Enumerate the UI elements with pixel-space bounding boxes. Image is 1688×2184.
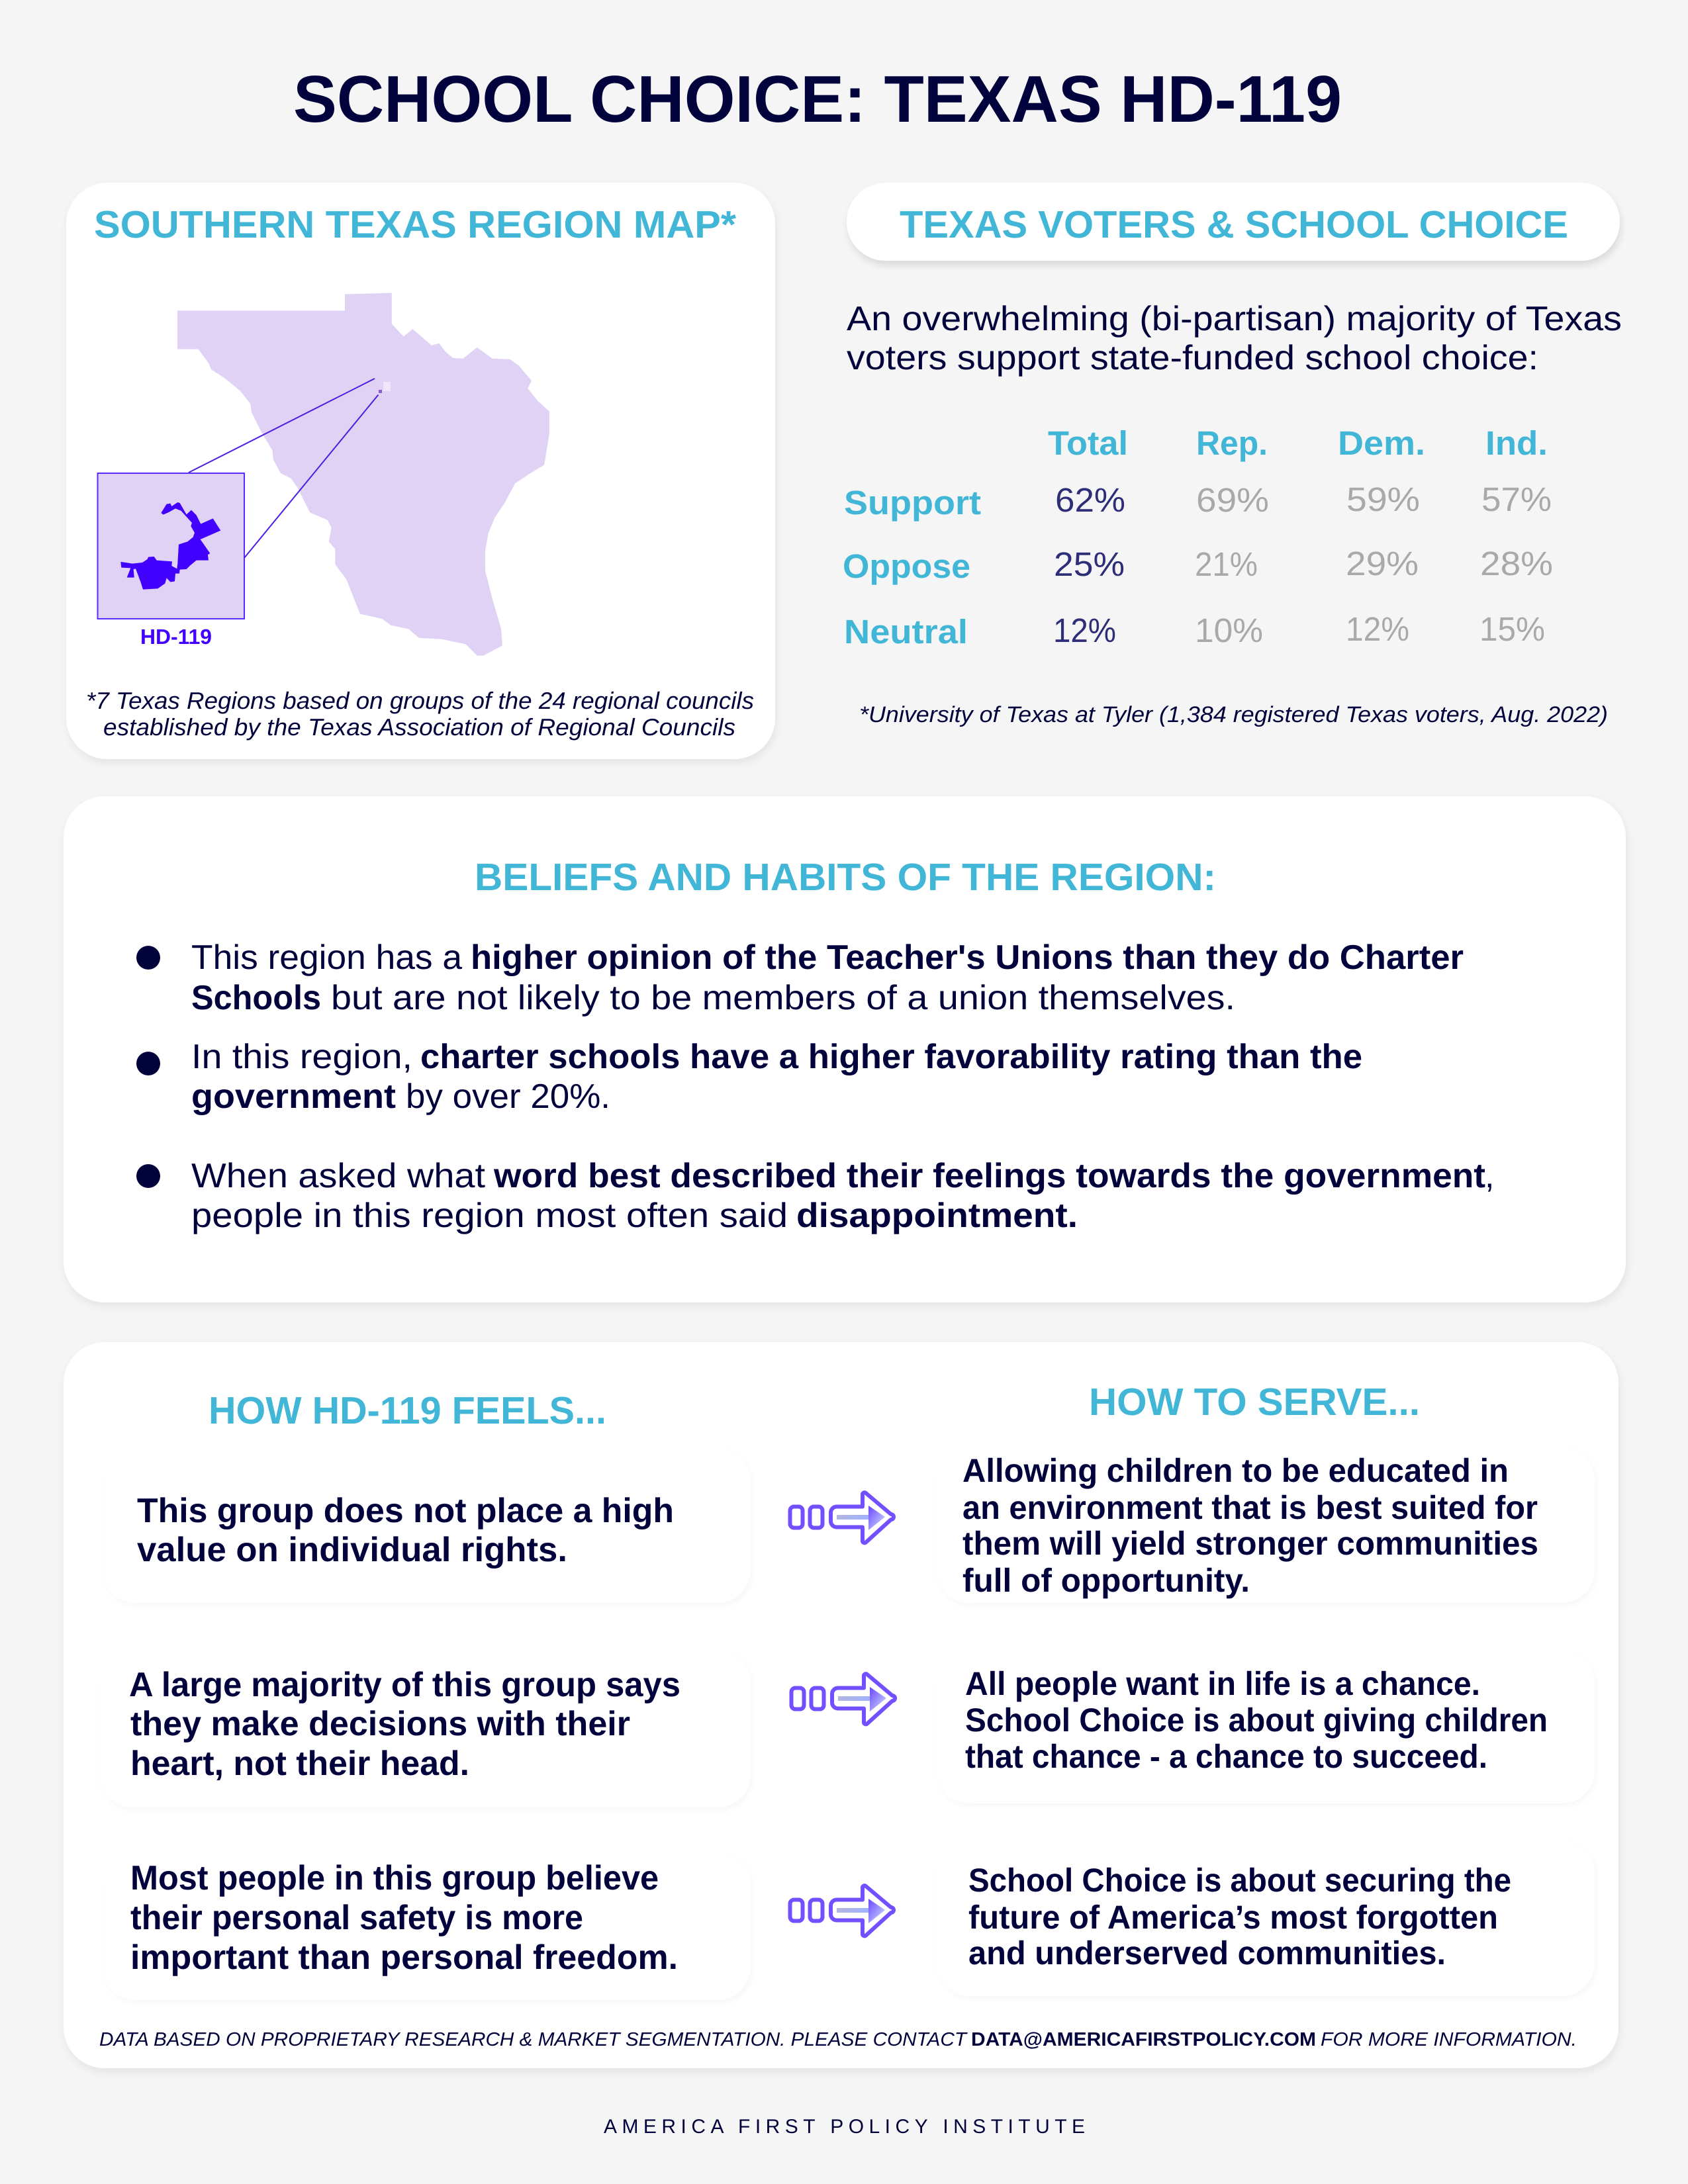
data disclaimer: FOR MORE INFORMATION.: [1321, 2029, 1577, 2050]
panel: Texas voters and school choice: [843, 183, 1622, 727]
bullet 1: This region has a: [191, 938, 462, 977]
card: forgotten communities: and underserved communities.: [968, 1934, 1446, 1972]
bullet 3: ,: [1485, 1157, 1494, 1195]
heading: how HD-119 feels: HOW HD-119 FEELS...: [209, 1389, 606, 1432]
bullet 1: [136, 938, 1464, 1017]
intro text: An overwhelming (bi-partisan) majority of Texas: [847, 300, 1622, 338]
table: support by party: Ind.: [1485, 424, 1548, 462]
arrow 1: [790, 1492, 894, 1543]
table: support by party: 15%: [1479, 610, 1545, 648]
table: support by party: 59%: [1346, 480, 1420, 518]
table: support by party: 10%: [1195, 612, 1263, 649]
card: heart not head: they make decisions with their: [130, 1705, 630, 1743]
card: forgotten communities: School Choice is about securing the: [968, 1862, 1511, 1899]
card: heart not head: [99, 1651, 751, 1807]
panel: how HD-119 feels and how to serve: [64, 1342, 1618, 2068]
arrow 3: [790, 1886, 894, 1936]
table: support by party: 69%: [1196, 481, 1269, 519]
card: allowing children: full of opportunity.: [962, 1562, 1250, 1599]
bullet 2: charter schools have a higher favorability rating than the: [420, 1038, 1362, 1076]
intro text: voters support state-funded school choice:: [847, 339, 1538, 377]
table: support by party: 21%: [1195, 545, 1258, 583]
data disclaimer: DATA@AMERICAFIRSTPOLICY.COM: [971, 2029, 1316, 2050]
bullet 2: by over 20%.: [406, 1077, 610, 1116]
label: HD-119: HD-119: [140, 625, 212, 649]
bullet 1: but are not likely to be members of a union themselves.: [331, 979, 1235, 1017]
bullet 2: government: [191, 1077, 396, 1116]
card: forgotten communities: [937, 1841, 1595, 1996]
table: support by party: 12%: [1346, 610, 1409, 648]
table: support by party: Neutral: [844, 613, 968, 651]
panel: southern Texas region map: [66, 183, 775, 759]
heading pill: [847, 183, 1620, 261]
title: SCHOOL CHOICE: TEXAS HD-119: [293, 62, 1342, 136]
footnote: regions: [86, 687, 754, 741]
table: support by party: Support: [844, 484, 981, 522]
heading: region map: SOUTHERN TEXAS REGION MAP*: [94, 203, 736, 246]
card: a chance: [937, 1651, 1595, 1803]
table: support by party: Dem.: [1338, 424, 1425, 462]
intro text: [847, 300, 1622, 377]
heading: beliefs and habits: BELIEFS AND HABITS OF THE REGION:: [475, 856, 1216, 899]
table: support by party: [843, 424, 1553, 651]
card: individual rights: This group does not place a high: [137, 1492, 674, 1530]
card: a chance: All people want in life is a chance.: [965, 1665, 1480, 1702]
bullet 3: word best described their feelings towards the government: [493, 1157, 1485, 1195]
table: support by party: Oppose: [843, 547, 970, 585]
table: support by party: 12%: [1053, 612, 1116, 649]
bullet 3: When asked what: [191, 1157, 486, 1195]
table: support by party: 57%: [1481, 480, 1552, 518]
card: individual rights: value on individual rights.: [137, 1531, 567, 1569]
card: a chance: School Choice is about giving children: [965, 1702, 1548, 1739]
data disclaimer: [99, 2029, 1577, 2050]
card: personal safety: [103, 1854, 751, 2000]
footnote: survey source: *University of Texas at Tyler (1,384 registered Texas voters, Aug. 2022): [859, 702, 1608, 727]
bullet 2: [136, 1038, 1362, 1116]
card: heart not head: A large majority of this group says: [129, 1666, 680, 1704]
table: support by party: 25%: [1054, 545, 1125, 583]
card: allowing children: [937, 1447, 1595, 1603]
table: support by party: 29%: [1346, 545, 1419, 582]
bullet 1: Schools: [191, 979, 321, 1017]
heading pill: TEXAS VOTERS & SCHOOL CHOICE: [900, 203, 1568, 246]
table: support by party: 28%: [1480, 545, 1553, 582]
footer: organization name: AMERICA FIRST POLICY INSTITUTE: [604, 2116, 1085, 2138]
bullet 1: higher opinion of the Teacher's Unions than they do Charter: [471, 938, 1464, 977]
table: support by party: Rep.: [1196, 424, 1268, 462]
arrow 2: [792, 1674, 895, 1724]
card: allowing children: Allowing children to be educated in: [962, 1452, 1509, 1489]
card: forgotten communities: future of America’s most forgotten: [968, 1899, 1498, 1936]
card: allowing children: an environment that is best suited for: [962, 1489, 1538, 1526]
bullet 2: In this region,: [191, 1038, 412, 1076]
card: allowing children: them will yield stronger communities: [962, 1525, 1538, 1562]
footnote: regions: established by the Texas Association of Regional Councils: [103, 713, 735, 741]
card: individual rights: [103, 1449, 751, 1603]
bullet 3: disappointment.: [796, 1197, 1078, 1235]
card: a chance: that chance - a chance to succeed.: [965, 1738, 1487, 1775]
table: support by party: 62%: [1055, 481, 1125, 519]
map: southern Texas region with HD-119 inset: [98, 293, 549, 656]
bullet 3: people in this region most often said: [191, 1197, 788, 1235]
card: heart not head: heart, not their head.: [130, 1745, 469, 1783]
bullet 3: [136, 1157, 1494, 1235]
heading: how to serve: HOW TO SERVE...: [1089, 1381, 1420, 1424]
card: personal safety: their personal safety is more: [130, 1899, 583, 1937]
footnote: regions: *7 Texas Regions based on groups of the 24 regional councils: [86, 687, 754, 714]
data disclaimer: DATA BASED ON PROPRIETARY RESEARCH & MARKET SEGMENTATION. PLEASE CONTACT: [99, 2029, 968, 2050]
table: support by party: Total: [1048, 424, 1128, 462]
card: personal safety: Most people in this group believe: [130, 1859, 659, 1897]
panel: beliefs and habits: [64, 796, 1626, 1302]
card: personal safety: important than personal freedom.: [130, 1938, 678, 1977]
